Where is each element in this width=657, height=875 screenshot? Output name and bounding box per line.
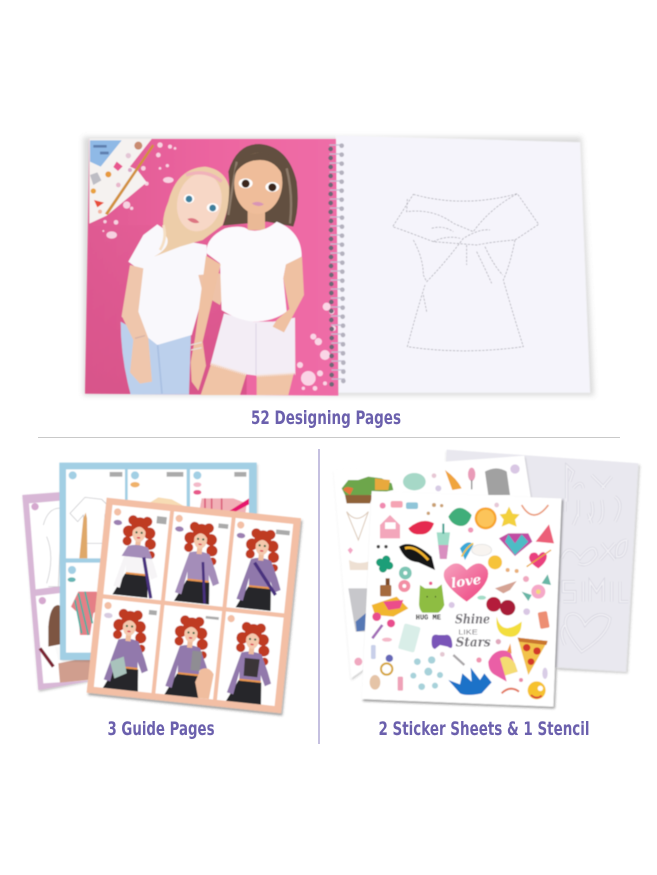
front sticker sheet (362, 491, 563, 708)
horizontal divider (38, 437, 620, 438)
cactus cat (419, 582, 444, 615)
step 2 panel (165, 511, 232, 607)
heart with arrow (527, 550, 551, 568)
dotted top outline to colour in (393, 194, 539, 351)
donuts (398, 567, 412, 592)
neck (248, 207, 265, 230)
orange slice (475, 507, 497, 529)
envelope (380, 515, 400, 538)
stencil sheet (445, 450, 640, 673)
soda can (538, 611, 550, 629)
pizza slice (518, 638, 548, 675)
glitter crown (448, 668, 492, 695)
lilac guide sheet (22, 491, 115, 692)
game controller (432, 635, 452, 649)
mug (380, 578, 391, 596)
heart: love (444, 563, 488, 602)
winking emoji (528, 681, 546, 699)
pencil (79, 513, 87, 558)
white drawing page (336, 136, 590, 393)
shine like stars lettering: LIKE (458, 627, 478, 636)
heading: 52 designing pages: 52 Designing Pages (251, 407, 401, 429)
unicorn head (488, 643, 518, 682)
spiral binding (328, 147, 334, 387)
bubble tea (437, 524, 450, 559)
back sticker sheet (333, 456, 538, 680)
brunette step figure (48, 605, 68, 647)
brunette girl (191, 144, 304, 395)
blue guide sheet (59, 463, 258, 662)
white paint splatters (102, 142, 336, 391)
diamond (499, 533, 532, 556)
dragonfly (495, 581, 517, 593)
cheers lettering (399, 544, 435, 570)
star (500, 507, 520, 527)
panel: sticker sheets and stencil (333, 450, 640, 708)
clover (376, 556, 393, 572)
shine like stars lettering: Shine (455, 611, 490, 626)
emoji (488, 555, 502, 569)
heading: 3 guide pages: 3 Guide Pages (108, 718, 214, 740)
striped shirts (143, 497, 185, 517)
step 4 panel (94, 598, 161, 693)
face (232, 151, 284, 216)
shorts (211, 313, 295, 376)
tied shirt outline (70, 497, 118, 543)
floral cluster (410, 656, 443, 690)
palm leaf (448, 508, 472, 526)
peach guide sheet (87, 498, 302, 716)
spiral wire (336, 144, 338, 384)
shine like stars lettering: Stars (456, 635, 491, 650)
step 3 panel (226, 518, 293, 613)
pencil (105, 144, 154, 215)
step 6 panel (217, 611, 284, 706)
panel: sketchbook spread (83, 136, 594, 396)
ring (381, 655, 393, 675)
lips (408, 521, 434, 534)
necklace (522, 505, 548, 515)
sunglasses (391, 501, 418, 509)
shine like stars lettering (455, 611, 491, 650)
blonde girl (121, 167, 231, 394)
heart: love: love (450, 572, 482, 592)
phone (398, 623, 421, 653)
spiral holes (339, 143, 346, 383)
bare legs (201, 362, 294, 395)
roller skate (372, 597, 408, 627)
hug me label: HUG ME (416, 615, 441, 623)
pink book cover (85, 139, 338, 396)
cherries (486, 597, 515, 615)
panel: guide pages (22, 463, 302, 716)
flower (522, 574, 551, 601)
line-art girl sketch (43, 508, 62, 587)
vertical divider (318, 449, 320, 744)
banana (496, 617, 522, 637)
hug me label (411, 613, 446, 623)
step 5 panel (155, 605, 222, 699)
tee (207, 222, 302, 322)
small charms (370, 503, 548, 693)
book shadow (83, 137, 594, 396)
arms (191, 256, 221, 391)
watermelon (536, 524, 554, 543)
step 1 panel (103, 505, 170, 600)
unicorn (460, 542, 492, 560)
sticker sheets on cover (89, 139, 152, 224)
